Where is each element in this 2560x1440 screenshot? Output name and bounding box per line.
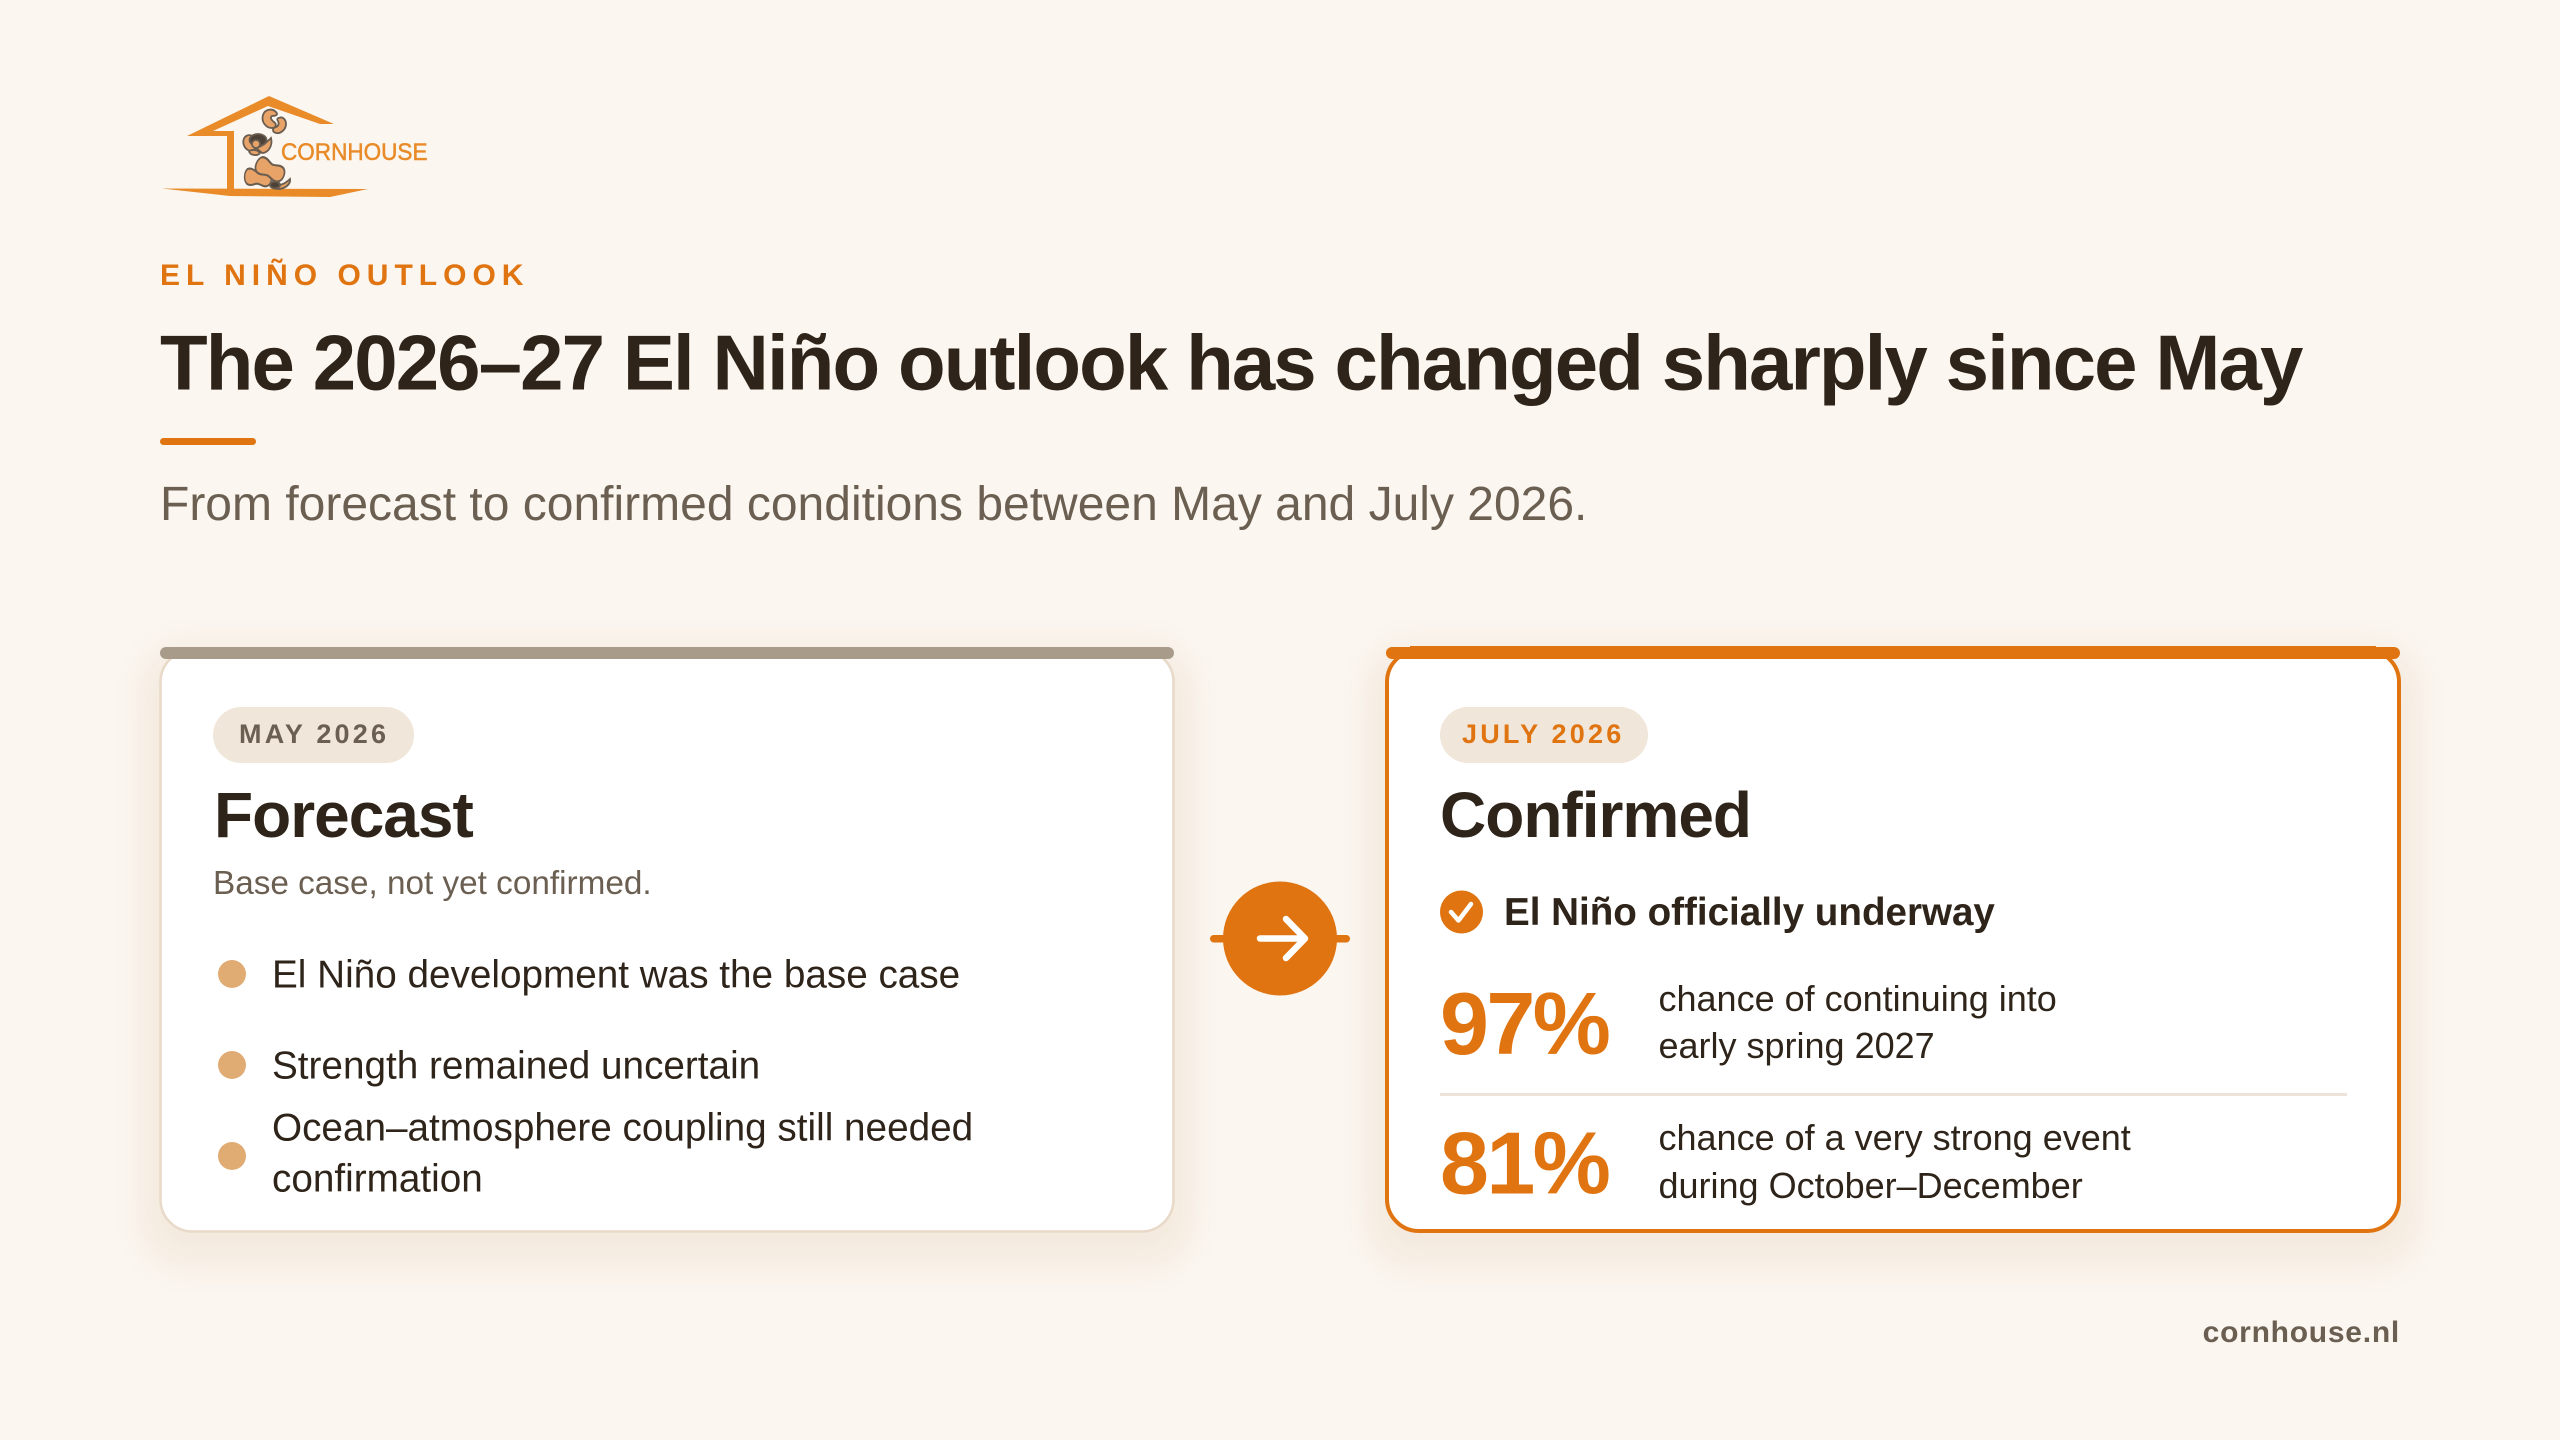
heading: Forecast: Forecast <box>214 779 473 851</box>
bullet 3: confirmation <box>272 1158 483 1200</box>
panel: May 2026 forecast <box>134 636 1200 1276</box>
panel: July 2026 confirmed <box>1360 636 2426 1276</box>
badge: May 2026 <box>213 707 414 763</box>
bullet 3: Ocean–atmosphere coupling still needed <box>272 1106 973 1150</box>
stat: 97%: chance of continuing into <box>1658 978 2057 1019</box>
card subtitle: Base case, not yet confirmed. <box>213 865 652 902</box>
title underline <box>160 438 256 445</box>
stat: 97%: 97% <box>1440 974 1609 1073</box>
logo wordmark: CORNHOUSE <box>281 139 428 166</box>
eyebrow: EL NIÑO OUTLOOK <box>160 258 529 292</box>
stat: 81%: 81% <box>1440 1114 1609 1212</box>
stat: 81% <box>1440 1114 2131 1212</box>
card top accent <box>160 647 1174 659</box>
title: The 2026–27 El Niño outlook has changed sharply since May <box>160 318 2303 406</box>
bullet 2: Strength remained uncertain <box>272 1044 760 1088</box>
status row: El Niño officially underway <box>1504 891 1995 934</box>
stat: 97%: early spring 2027 <box>1658 1025 1935 1066</box>
card shadow <box>134 636 1200 1276</box>
bullet 3 <box>218 1106 973 1200</box>
stat: 81%: chance of a very strong event <box>1658 1117 2131 1158</box>
divider <box>1440 1093 2347 1096</box>
icon: peanuts <box>241 110 290 189</box>
subtitle: From forecast to confirmed conditions between May and July 2026. <box>160 478 1587 531</box>
card shadow <box>1360 636 2426 1276</box>
footer: website: cornhouse.nl <box>2203 1316 2400 1349</box>
card body <box>160 650 1174 1232</box>
heading: Confirmed: Confirmed <box>1440 779 1751 851</box>
bullet list <box>218 954 973 1200</box>
bullet 1: El Niño development was the base case <box>272 954 960 996</box>
card body <box>1387 650 2399 1231</box>
badge: July 2026 <box>1440 707 1648 763</box>
stat: 81%: during October–December <box>1658 1165 2083 1206</box>
badge: July 2026: JULY 2026 <box>1462 719 1624 749</box>
arrow: forecast to confirmed <box>1210 882 1350 996</box>
card top accent <box>1386 646 2400 659</box>
icon: check <box>1440 890 1483 934</box>
logo: Cornhouse <box>162 96 428 197</box>
icon: house outline <box>162 96 368 197</box>
badge: May 2026: MAY 2026 <box>239 719 389 749</box>
stat: 97% <box>1440 974 2057 1073</box>
